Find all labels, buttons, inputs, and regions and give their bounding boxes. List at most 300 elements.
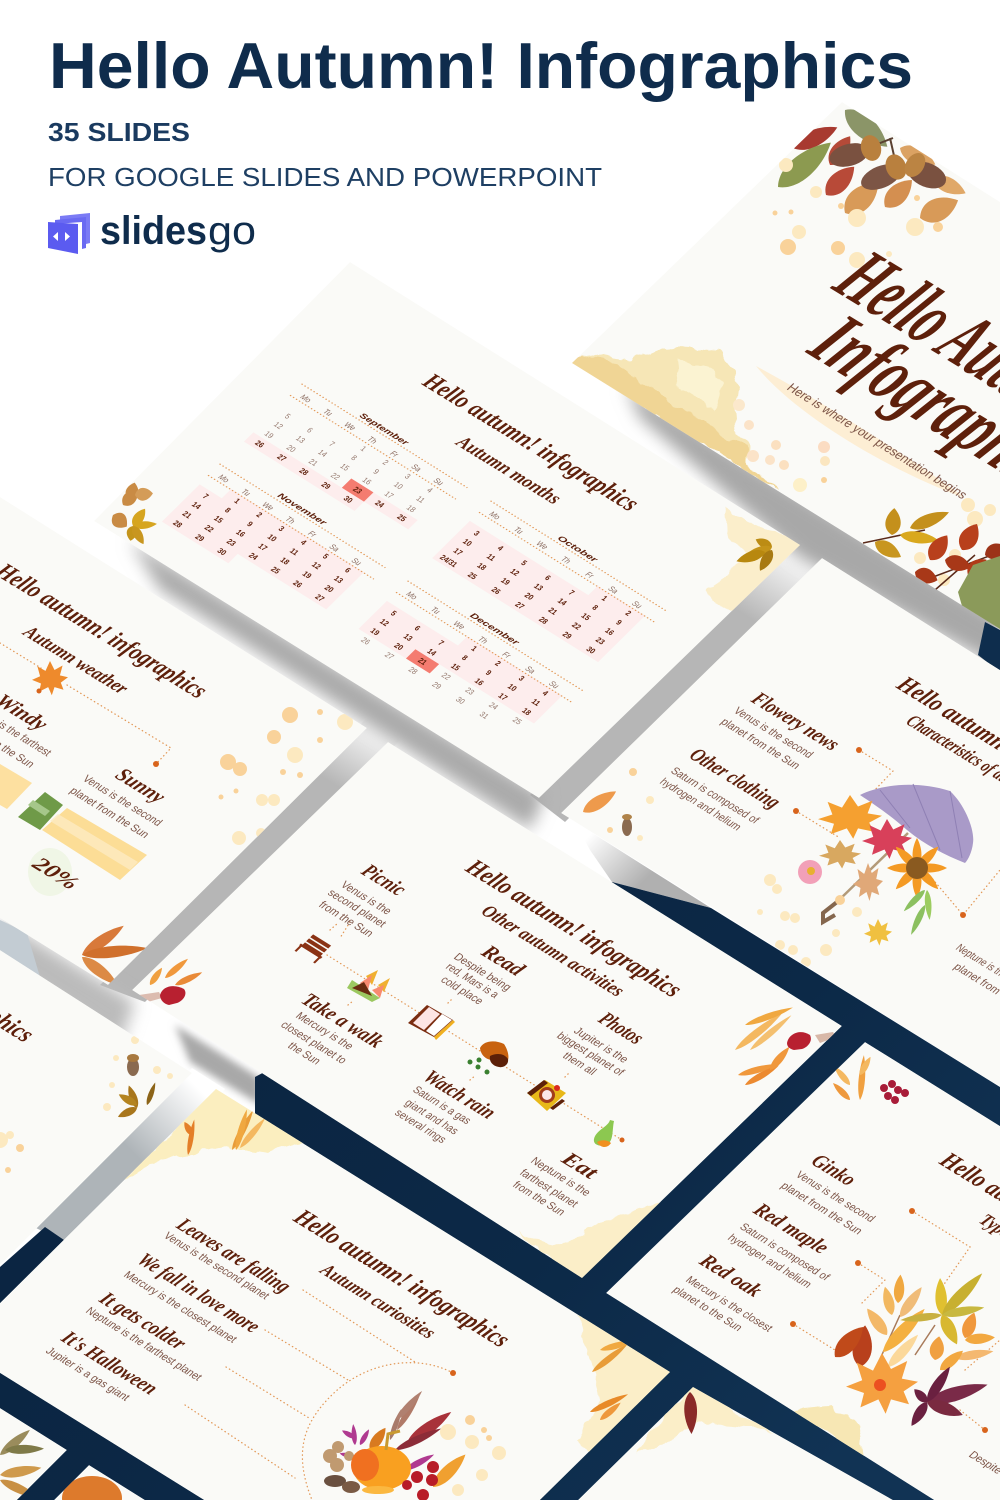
panel: bottom left slide [0,1408,67,1500]
calendar: November: Sa [327,542,341,553]
calendar: November: 17 [256,542,269,553]
calendar: September: Fr [388,449,401,459]
block: Picnic: Venus is the [338,879,394,917]
block: Watch rain: Saturn is a gas [410,1084,474,1127]
calendar: November [162,464,386,609]
block: Other clothing: Saturn is composed of [668,765,762,827]
calendar: November: 11 [288,546,301,557]
calendar: December: 30 [454,695,467,706]
leaf sprig right [736,538,774,571]
block: Red maple [725,1199,834,1290]
watercolor corner [708,510,810,615]
calendar: November: 26 [291,579,304,589]
dotted connectors [796,750,1000,915]
calendar: November: Tu [239,487,253,498]
block: Leaves are falling: Leaves are falling [170,1214,296,1297]
calendar: October: 18 [475,561,488,572]
calendar: December [359,580,583,724]
calendar: December: 4 [540,689,551,698]
calendar: October: 19 [499,576,512,587]
calendar: November: 10 [265,532,279,543]
calendar: November: 8 [223,506,233,515]
block: Ginko: planet from the Sun [778,1180,865,1237]
watercolor stain [565,347,780,490]
orange leaf corner [82,926,146,983]
calendar: December: 1 [469,644,480,653]
block: Watch rain [392,1066,501,1146]
slide subtitle: Autumn weather [18,622,134,698]
calendar: November: 14 [190,500,204,511]
calendar: December: 8 [460,653,470,662]
calendar: September: 4 [425,486,435,495]
calendar: September: We [342,420,358,432]
subtitle brush [756,366,965,498]
logo wordmark: slides [100,209,207,253]
calendar: December: 19 [368,626,382,637]
calendar: September: 6 [305,426,315,435]
title: Hello Autumn! Infographics [49,29,913,102]
block: Read: Read [475,941,531,981]
calendar: November: 2 [254,510,264,519]
calendar: November: 3 [276,524,287,533]
subtitle line: Here is where your presentation begins [784,381,971,502]
calendar: December: 31 [477,710,491,721]
icon: trees [347,970,390,1002]
calendar: December: Tu [429,605,443,616]
calendar: October: Su [630,599,645,611]
calendar: November: 16 [234,528,247,539]
pumpkin bouquet [323,1389,470,1500]
calendar: December: 9 [483,668,494,677]
block: Red maple: hydrogen and helium [725,1232,814,1290]
calendar: October: 1 [600,594,610,603]
block: Eat: farthest planet [517,1167,581,1210]
block: Watch rain: several rings [392,1107,449,1146]
block: Watch rain: giant and has [402,1097,462,1137]
calendar: November: 24 [247,551,261,562]
calendar: September: Su [431,476,446,488]
leaf sprigs top [182,1109,268,1155]
block: Take a walk: Take a walk [296,989,389,1052]
leaf bouquet [829,1269,995,1429]
calendar: September: 16 [360,475,374,486]
splatter lower [733,399,996,586]
calendar: December: 5 [389,609,399,618]
calendar: November: Su [349,556,364,568]
block: Photos: Photos [593,1008,649,1049]
dotted connectors [793,1211,1000,1430]
slide subtitle: Other autumn activities [477,901,629,1000]
block: Watch rain: Watch rain [418,1066,501,1123]
calendar: October: 7 [566,588,577,597]
navy background band [0,882,1000,1500]
calendar: November: 1 [232,496,243,506]
block: Other clothing: hydrogen and helium [657,776,744,833]
calendar: September: Th [365,435,379,446]
calendar: October: 2 [623,609,633,618]
block: Picnic: second planet [325,887,389,930]
block: Read: Despite being [451,951,514,993]
calendar: November: 20 [322,583,336,594]
calendar: November: 28 [171,518,184,529]
block: Picnic: Picnic [355,860,411,900]
calendar: November: 25 [269,565,283,576]
block: Red oak: Red oak [693,1250,767,1301]
block: Take a walk: closest planet to [278,1019,349,1066]
calendar: December: Mo [404,590,419,601]
panel: bottom middle-left slide [54,1465,145,1500]
calendar: December: Su [547,679,562,691]
calendar: November: 19 [300,569,314,580]
calendar: October: 14 [555,596,570,608]
slide count: 35 SLIDES [48,117,190,147]
calendar: September: 1 [358,444,369,453]
calendar: October: 17 [451,546,465,557]
block: It's Halloween: Jupiter is a gas giant [43,1345,132,1403]
mushroom and leaves right [733,1005,836,1088]
block: Sunny: Venus is the second [80,773,165,829]
block: Red oak: planet to the Sun [670,1284,745,1334]
calendar: November: November [275,491,330,528]
page heading block [48,29,913,254]
calendar: October: Sa [606,584,620,595]
calendar: September: 3 [403,472,413,481]
calendar: December: 26 [359,635,372,646]
block: Ginko [778,1150,878,1237]
calendar: September: 12 [272,420,285,431]
leaf sprigs right [589,1338,636,1422]
calendar: September: 17 [382,489,396,500]
block: Flowery news: Venus is the second [731,705,816,761]
calendar: December: 2 [493,659,503,668]
calendar: September: Mo [298,393,313,404]
calendar: September: 29 [319,480,333,491]
calendar: September: 28 [297,466,311,477]
block: Photos [554,1008,649,1079]
connector dot [153,761,159,767]
calendar: December: 10 [505,682,519,693]
calendar: December: 17 [496,691,510,702]
watercolor bottom [517,1200,670,1285]
calendar: October: 3 [472,529,482,538]
dotted connectors [185,1290,453,1500]
calendar: November: We [260,500,276,512]
icon: camera [527,1080,566,1111]
slide title: Hello autumn! infographics [416,369,645,516]
icon: book [408,1005,455,1040]
calendar: November: 29 [193,532,207,543]
paint splatter top [772,158,943,268]
dotted connectors [0,643,171,764]
block: Eat: from the Sun [510,1179,568,1218]
calendar: October: 24/31 [438,553,460,569]
calendar: September: Sa [409,462,423,473]
calendar: September: 5 [283,412,293,421]
calendar: December: 11 [529,697,543,708]
watercolor right [575,1315,680,1455]
calendar: November: 5 [321,552,331,561]
calendar: September: 26 [253,438,266,449]
calendar: November: 15 [212,514,226,525]
calendar: October [432,500,666,662]
calendar: November: Th [283,515,297,526]
block: It's Halloween: It's Halloween [55,1327,163,1399]
block: Take a walk [278,989,389,1067]
block: Ginko: Ginko [806,1150,861,1190]
calendar: December: 14 [425,647,439,658]
slide drop shadows [0,385,1000,1245]
block: Take a walk: Mercury is the [293,1010,356,1052]
calendar: November: 6 [343,566,353,575]
watercolor bottom [790,1405,866,1462]
watercolor top left [125,1085,310,1180]
calendar: November: 12 [310,560,323,571]
connector dots [790,1208,988,1433]
paint splatter [607,768,862,967]
calendar: December: Th [476,635,490,646]
paint splatter [218,707,353,845]
connector dots [793,747,966,918]
calendar: October: October [555,534,601,565]
calendar: December: 3 [517,674,527,683]
calendar: October: 13 [532,582,545,593]
calendar: December: 22 [439,671,453,682]
block: Other clothing [660,750,780,830]
calendar: October: 23 [593,635,607,646]
acorn [127,1054,139,1076]
calendar: October: Th [559,555,573,566]
calendar: September: 19 [262,429,276,440]
panel: tree types slide [606,1042,1000,1500]
watercolor corner [635,1380,770,1455]
logo icon: stacked slides [48,213,90,254]
block: Photos: biggest planet of [554,1030,627,1079]
oak leaf and acorn left [580,786,632,836]
calendar: October: 12 [508,567,522,578]
calendar: October: 27 [513,600,526,611]
calendar: October: 16 [603,626,616,637]
calendar: December: 15 [449,662,463,673]
calendar: October: Tu [512,525,526,536]
calendar: September [244,384,468,529]
brown leaves [116,1082,158,1120]
block: Red oak: Mercury is the closest [683,1274,775,1334]
connector dot [450,1370,456,1376]
panel: bottom center slide [578,1380,893,1500]
panel: characteristics slide [561,558,1000,1087]
calendar: November: 22 [202,523,216,534]
calendar: September: 22 [329,471,342,482]
calendar: December: 27 [383,650,396,661]
block: Eat: Neptune is the [528,1155,593,1199]
calendar: October: 8 [590,603,600,612]
calendar: December: 29 [430,680,443,691]
calendar: December: 28 [406,665,420,676]
calendar: September: 21 [307,457,320,468]
calendar: October: Fr [583,570,596,580]
top leaves and berries [831,1055,909,1104]
calendar: December: 16 [472,676,486,687]
calendar: September: 9 [371,467,381,476]
icon: pear [594,1120,624,1147]
calendar: September: 14 [316,448,329,459]
acorns and oak leaves [778,109,966,223]
calendar: September: 2 [381,458,391,467]
umbrella bouquet [798,784,973,946]
calendar: November: 23 [225,537,238,548]
block: Read [438,941,531,1007]
panel: title slide [565,102,1000,632]
panel: autumn months calendar slide [112,374,800,798]
panel: other autumn activities slide [132,742,842,1285]
calendar: October: 9 [614,618,624,627]
calendar: December: Sa [523,664,537,675]
slide title: Hello autumn! infographics [459,855,688,1002]
maple leaf icon [32,661,68,695]
calendar: September: 30 [341,494,355,505]
calendar: November: 30 [215,546,229,557]
calendar: November: 13 [332,574,345,585]
slide subtitle: Autumn months [451,432,566,508]
calendar: September: 24 [373,499,387,510]
calendar: November: Fr [306,529,319,539]
block: Photos: Jupiter is the [571,1025,631,1066]
calendar: September: 27 [275,452,289,463]
block: Photos: them all [560,1050,599,1078]
logo wordmark: go [208,209,256,253]
mushroom and sprig left [139,956,204,1005]
calendar: October: 15 [579,611,593,623]
calendar: December: 23 [463,686,477,697]
block: We fall in love more: We fall in love more [132,1249,265,1337]
calendar: December: 18 [520,706,533,717]
panel: autumn weather slide [0,564,366,985]
calendar: December: 7 [436,639,446,647]
paint splatter [440,1415,506,1496]
block: Eat: Eat [555,1148,604,1184]
calendar: October: 21 [546,606,560,617]
calendar: September: 23 [351,485,364,496]
slide title: Hello autumn! infographics [287,1205,516,1352]
block: Red oak [670,1250,775,1334]
calendar: October: 22 [570,621,583,631]
olive leaves [0,1427,44,1500]
calendar: October: 29 [560,630,574,641]
block: Picnic [316,860,411,940]
calendar: October: 26 [489,585,503,596]
block: Ginko: Venus is the second [793,1169,878,1225]
percent label: 20% [26,853,84,894]
calendar: October: We [534,539,550,551]
calendar: October: 10 [461,537,474,548]
calendar: September: 15 [338,462,351,473]
block: Read: cold place [438,974,486,1007]
timeline dotted line [327,922,622,1140]
block: Flowery news: planet from the Sun [718,716,803,772]
calendar: September: September [357,411,412,448]
script title [804,252,1000,472]
calendar: November: 27 [313,592,327,603]
calendar: December: Fr [500,650,513,660]
calendar: October: Mo [487,510,502,521]
block: Eat [510,1148,604,1218]
calendar: November: 7 [201,492,211,501]
calendar: September: 7 [327,440,337,448]
calendar: September: 20 [284,443,298,454]
calendar: December: 20 [392,641,405,652]
calendar: October: 20 [522,591,536,602]
panel: autumn curiosities slide [0,1085,680,1500]
calendar: September: 11 [414,494,427,505]
calendar: September: 25 [395,512,409,524]
calendar: September: 8 [349,453,359,462]
block: Take a walk: the Sun [285,1040,323,1067]
block: Flowery news [719,692,838,770]
dark red leaf [684,1392,698,1434]
calendar: December: December [468,611,522,648]
calendar: October: 5 [519,559,530,568]
leaf sprig left [112,482,157,544]
block: Red maple: Red maple [747,1199,834,1258]
calendar: November: Mo [216,473,231,484]
calendar: December: We [451,619,467,631]
icon: bench [294,933,333,964]
calendar: December: 21 [416,656,430,667]
block: Read: red, Mars is a [443,961,502,1001]
calendar: December: 25 [510,715,524,726]
calendar: November: 4 [299,538,309,547]
block: Red maple: Saturn is composed of [737,1221,833,1284]
calendar: October: 28 [537,615,550,626]
calendar: December: 13 [401,632,415,643]
block: Picnic: from the Sun [316,899,376,940]
calendar: September: 10 [392,480,405,491]
block: It gets colder: It gets colder [93,1288,191,1354]
calendar: October: 25 [466,570,480,582]
calendar: September: 13 [294,434,307,445]
calendar: September: Tu [321,407,335,418]
calendar: September: 18 [404,503,418,514]
panel: hidden left slide [0,900,192,1265]
calendar: October: 11 [484,552,498,563]
block: Sunny: planet from the Sun [67,785,152,841]
block: Leaves are falling: Venus is the second planet [161,1230,272,1302]
calendar: December: 6 [412,624,423,633]
block: Flowery news: Flowery news [745,688,845,755]
calendar: November: 9 [245,520,255,528]
icon: rain cloud [468,1041,508,1074]
calendar: October: 4 [495,544,506,553]
bar chart segments [0,764,147,880]
orange leaf [62,1476,122,1500]
calendar: November: 18 [278,555,292,566]
calendar: October: 30 [584,645,598,656]
subtitle: FOR GOOGLE SLIDES AND POWERPOINT [48,162,602,192]
gold and red leaves [863,506,1000,632]
block: We fall in love more: Mercury is the closest planet [121,1269,239,1345]
calendar: October: 6 [543,573,553,582]
percent label [28,848,79,896]
block: Sunny: Sunny [110,764,171,808]
calendar: November: 21 [180,509,194,521]
navy corner right [978,622,1000,672]
block: Other clothing: Other clothing [684,744,786,813]
calendar: December: 12 [378,617,391,628]
calendar: December: 24 [487,701,500,711]
slide subtitle: Autumn curiosities [315,1260,441,1342]
paint splatter [0,1036,173,1173]
block: It gets colder: Neptune is the farthest planet [83,1305,204,1383]
